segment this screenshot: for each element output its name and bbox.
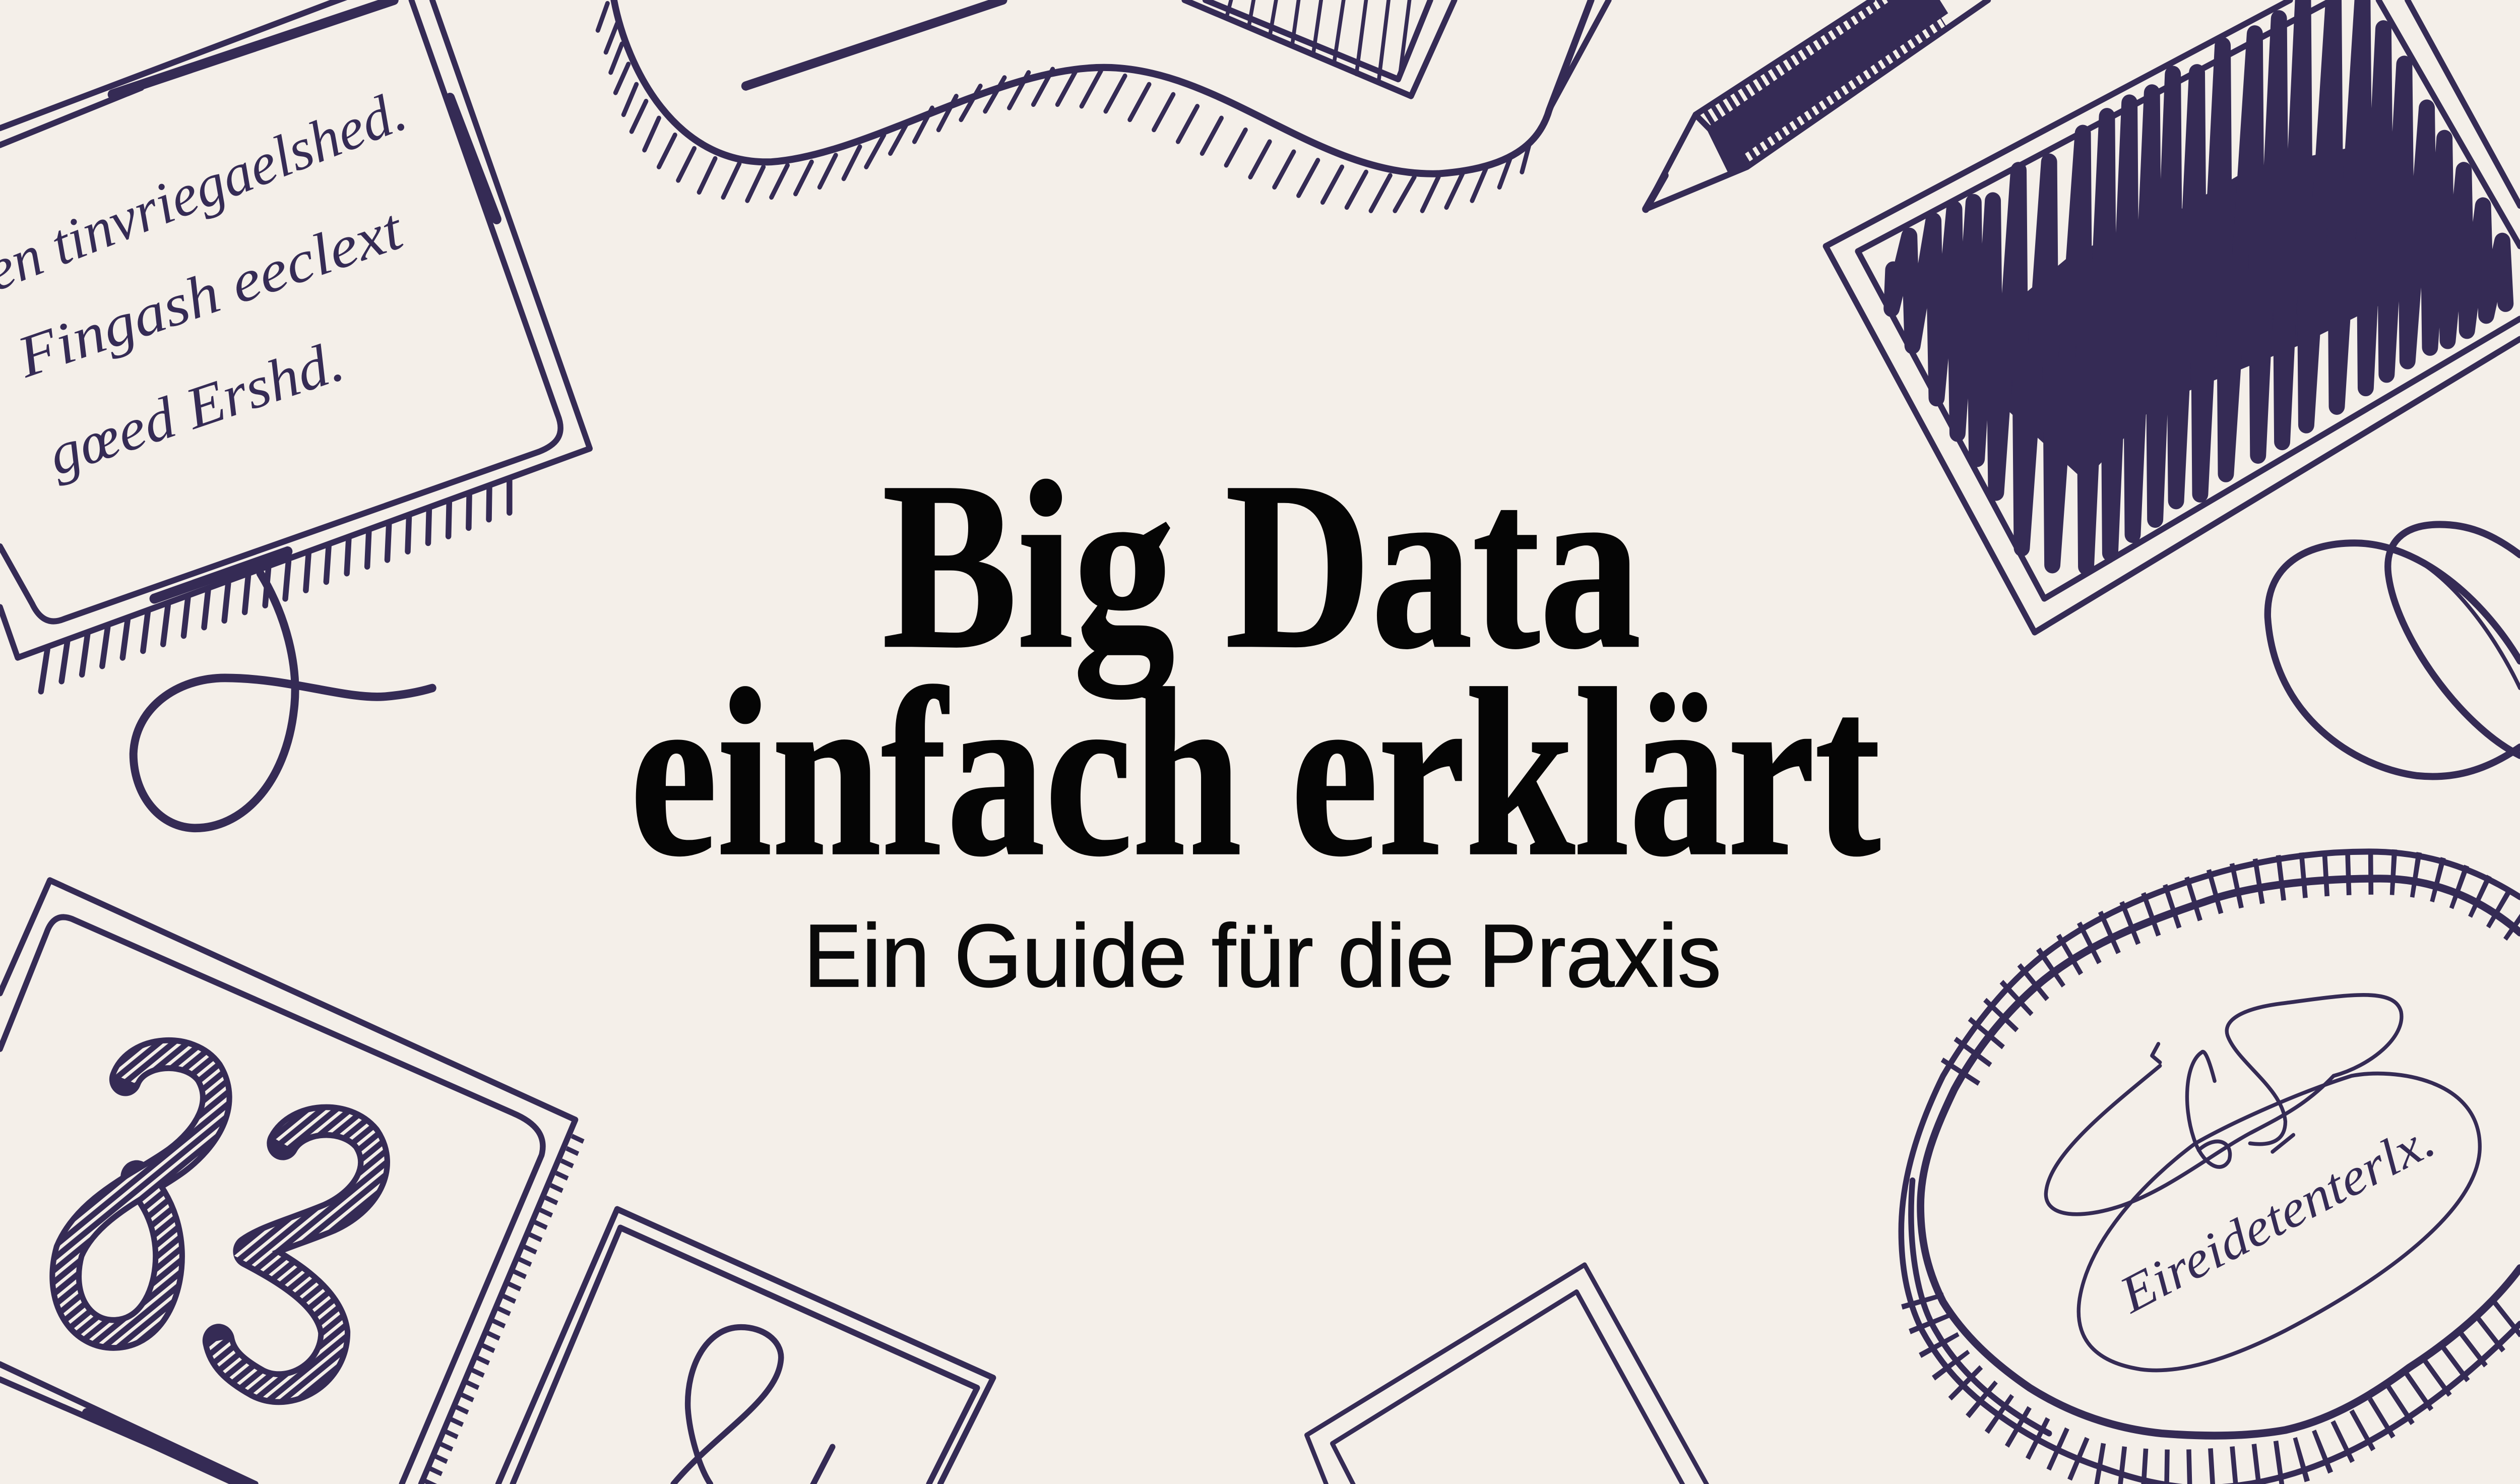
- panel: numbers card: [0, 880, 579, 1484]
- card frame: [498, 1209, 993, 1484]
- oval rings: [1901, 851, 2520, 1484]
- hatch marks under card: [41, 480, 510, 692]
- title line 2: einfach erklärt: [630, 640, 1882, 905]
- title: [630, 433, 1882, 905]
- zigzag scribble: [1892, 0, 2505, 567]
- pencil outline: [1646, 0, 1988, 209]
- panel: empty frame at bottom centre: [1306, 1265, 1709, 1484]
- panel: small note card with flourish: [498, 1209, 993, 1484]
- icon: pencil: [1646, 0, 1988, 209]
- pencil hatching: [1720, 0, 1936, 145]
- pencil core taper: [1700, 116, 1747, 172]
- panel: scribbled rectangle: [1825, 0, 2520, 633]
- subtitle: Ein Guide für die Praxis: [803, 905, 1721, 1006]
- handwritten text lines: gœed Ershd.: [41, 328, 351, 488]
- wave double edge: [1549, 0, 1609, 109]
- signature caption: Eireidetenterlx.: [2110, 1110, 2443, 1324]
- oval tick marks, lower arc: [1922, 1298, 2520, 1472]
- panel: wavy banner at top: [598, 0, 1609, 211]
- pen flourish: [673, 1327, 781, 1484]
- hatched digit 3: [219, 1121, 374, 1388]
- signature strokes: [2046, 995, 2480, 1371]
- hatched digit 8: [66, 1054, 216, 1334]
- wave hatch marks: [598, 4, 1530, 211]
- handwritten text lines: Fingash eeclext: [10, 196, 411, 390]
- panel: hatched box at top centre: [1184, 0, 1455, 96]
- wave outline: [614, 0, 1591, 174]
- panel: handwritten note card: [0, 0, 590, 828]
- panel: signature stamp oval: [1901, 851, 2520, 1484]
- rectangle frame: [1825, 0, 2520, 633]
- icon: interlocking rings: [2267, 524, 2520, 777]
- card frame: [0, 0, 590, 658]
- loop flourish: [134, 573, 432, 828]
- box frame: [1184, 0, 1455, 96]
- pen stroke inside banner: [746, 0, 1003, 86]
- card frame: [0, 880, 576, 1484]
- box hatch lines: [1226, 0, 1410, 79]
- ruler ticks along right edge: [429, 1137, 579, 1484]
- pencil lead: [1646, 175, 1665, 209]
- handwritten text lines: [0, 77, 414, 488]
- solid scribble core: [1993, 148, 2475, 480]
- oval tick marks, upper arc: [1955, 872, 2520, 1083]
- title line 1: Big Data: [883, 433, 1641, 702]
- short pen stroke: [811, 1447, 833, 1484]
